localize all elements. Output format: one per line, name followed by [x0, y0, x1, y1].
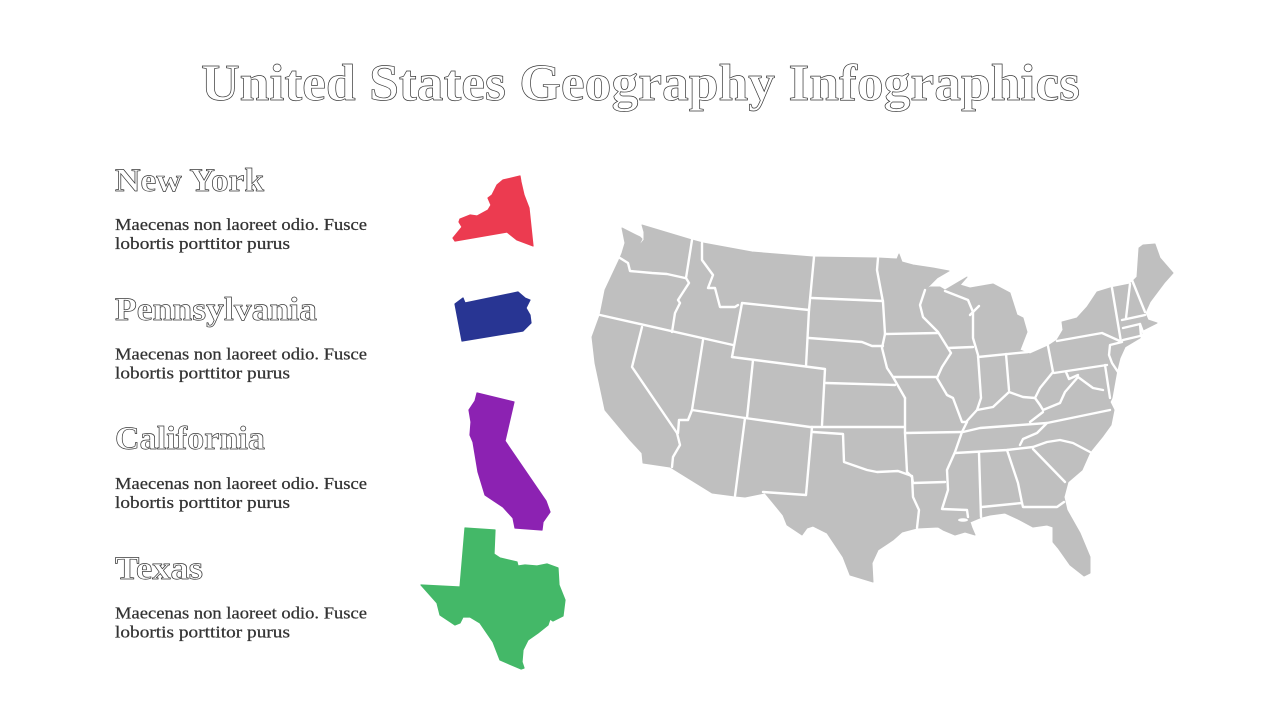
heading: Texas: Texas	[115, 551, 203, 587]
heading: Pennsylvania: Pennsylvania	[115, 292, 317, 328]
icon: New York state shape	[453, 176, 533, 246]
text block: Texas description: lobortis porttitor purus	[115, 622, 290, 642]
icon: California state shape	[469, 393, 550, 530]
text block: Texas description	[115, 604, 367, 642]
text block: California description: lobortis porttitor purus	[115, 493, 290, 512]
panel: Pennsylvania text	[115, 292, 367, 382]
panel: California text	[115, 421, 367, 512]
icon: Pennsylvania state shape	[455, 292, 531, 341]
text block: New York description	[115, 215, 367, 253]
state borders	[600, 240, 1145, 528]
map landmass	[592, 225, 1173, 582]
text block: New York description: lobortis porttitor purus	[115, 234, 290, 253]
text block: California description: Maecenas non laoreet odio. Fusce	[115, 474, 367, 493]
heading: New York: New York	[115, 163, 265, 199]
map: United States	[592, 225, 1173, 582]
text block: California description	[115, 474, 367, 512]
icon: Texas state shape	[421, 528, 565, 669]
title: United States Geography Infographics	[201, 55, 1080, 112]
text block: Pennsylvania description	[115, 344, 367, 382]
bay detail	[958, 518, 968, 522]
heading: California: California	[115, 421, 265, 457]
text block: New York description: Maecenas non laoreet odio. Fusce	[115, 215, 367, 234]
text block: Pennsylvania description: Maecenas non laoreet odio. Fusce	[115, 344, 367, 364]
text block: Pennsylvania description: lobortis porttitor purus	[115, 364, 290, 382]
text block: Texas description: Maecenas non laoreet odio. Fusce	[115, 604, 367, 622]
panel: New York text	[115, 163, 367, 253]
panel: Texas text	[115, 551, 367, 642]
